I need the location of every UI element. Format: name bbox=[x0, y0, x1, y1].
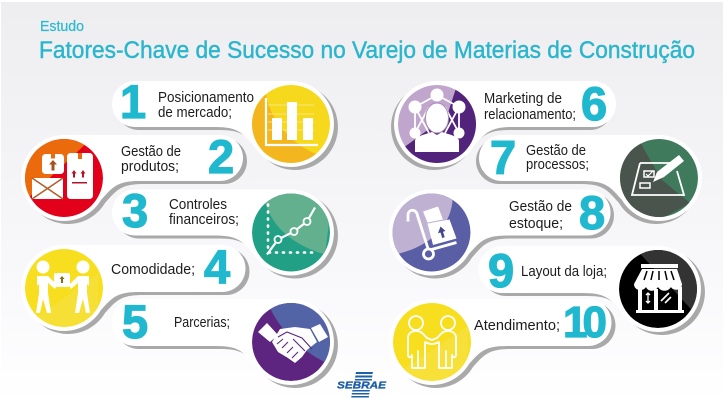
item 2: Gestão de produtos bbox=[21, 130, 247, 224]
icon: two people shaking hands bbox=[393, 303, 471, 384]
number 7: 7 bbox=[490, 131, 516, 184]
label: Layout da loja: Layout da loja; bbox=[521, 263, 607, 280]
number 9: 9 bbox=[488, 244, 514, 297]
label: Marketing de relacionamento: relacionamento; bbox=[484, 106, 576, 123]
item 4: Comodidade bbox=[25, 249, 250, 334]
label: Gestão de produtos: produtos; bbox=[121, 158, 179, 175]
item 1: Posicionamento de mercado bbox=[112, 75, 338, 170]
label: Marketing de relacionamento: Marketing de bbox=[484, 90, 562, 107]
label: Posicionamento de mercado bbox=[158, 89, 254, 121]
label: Controles financeiros: financeiros; bbox=[169, 211, 239, 228]
number 5: 5 bbox=[122, 295, 148, 348]
item 10: Atendimento bbox=[389, 298, 615, 388]
label: Controles financeiros bbox=[169, 196, 239, 228]
icon: checklist and pencil bbox=[620, 139, 698, 217]
label: Atendimento: Atendimento; bbox=[474, 317, 560, 334]
icon: storefront bbox=[619, 247, 700, 328]
label: Marketing de relacionamento bbox=[484, 90, 576, 123]
label: Gestão de processos bbox=[526, 142, 589, 173]
label: Controles financeiros: Controles bbox=[169, 196, 227, 213]
item 6: Marketing de relacionamento bbox=[391, 77, 616, 170]
item 5: Parcerias bbox=[122, 303, 338, 388]
label: Gestão de processos: processos; bbox=[526, 156, 589, 173]
icon: growth line chart bbox=[252, 190, 333, 272]
number 4: 4 bbox=[204, 240, 230, 293]
small heading: Estudo: Estudo bbox=[40, 19, 84, 35]
number 10: 10 bbox=[563, 298, 605, 347]
label: Gestão de estoque: Gestão de bbox=[509, 198, 572, 215]
number 6: 6 bbox=[581, 77, 607, 130]
icon: bar chart bbox=[249, 85, 330, 166]
icon: two people carrying a box bbox=[25, 249, 103, 330]
number 3: 3 bbox=[122, 184, 148, 237]
number 2: 2 bbox=[208, 130, 234, 183]
icon: person in network bbox=[398, 85, 476, 163]
icon: boxes bbox=[22, 136, 103, 217]
label: Gestão de estoque bbox=[509, 198, 572, 232]
label: Posicionamento de mercado: Posicionamento bbox=[158, 89, 254, 106]
number 1: 1 bbox=[120, 75, 146, 128]
icon: hand truck with boxes bbox=[390, 190, 470, 272]
logo: SEBRAE: SEBRAE bbox=[337, 380, 387, 392]
label: Comodidade: Comodidade; bbox=[111, 261, 195, 278]
item 3: Controles financeiros bbox=[112, 184, 338, 278]
item 7: Gestão de processos bbox=[476, 131, 702, 224]
label: Posicionamento de mercado: de mercado; bbox=[158, 104, 232, 121]
label: Gestão de processos: Gestão de bbox=[526, 142, 586, 159]
item 8: Gestão de estoque bbox=[389, 186, 614, 278]
logo: SEBRAE bbox=[337, 372, 387, 398]
item 9: Layout da loja bbox=[489, 250, 705, 335]
label: Parcerias: Parcerias; bbox=[174, 314, 230, 331]
label: Gestão de estoque: estoque; bbox=[509, 215, 563, 232]
label: Gestão de produtos bbox=[121, 143, 181, 175]
icon: handshake bbox=[252, 300, 333, 381]
number 8: 8 bbox=[579, 186, 605, 239]
label: Gestão de produtos: Gestão de bbox=[121, 143, 181, 160]
